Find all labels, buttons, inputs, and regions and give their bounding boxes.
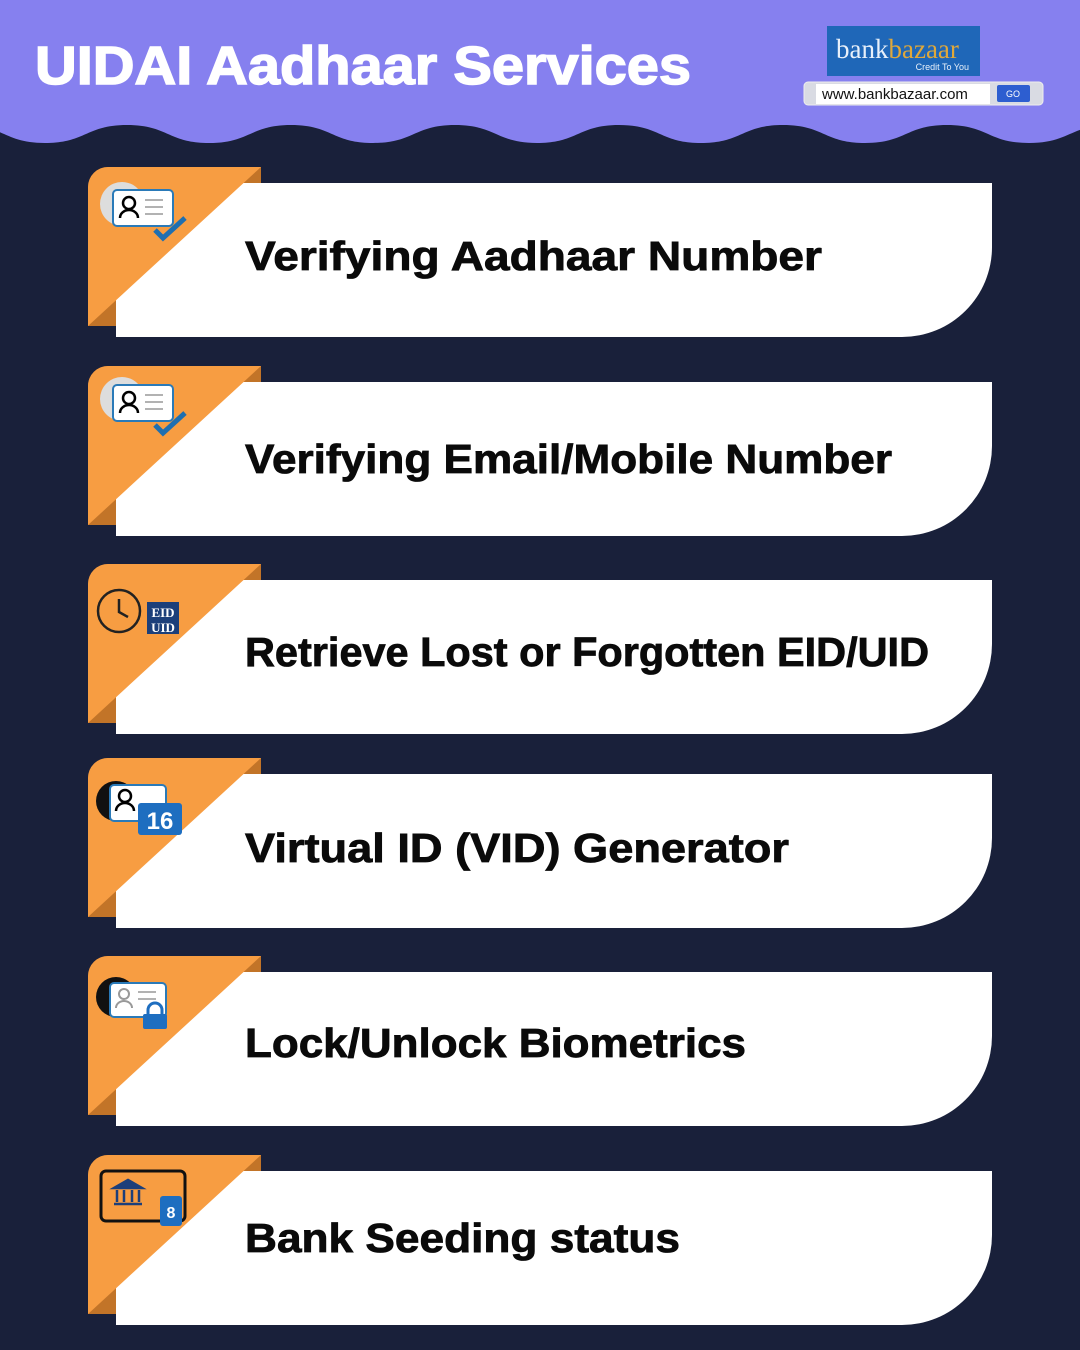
- icon: VID 16: [96, 781, 182, 835]
- logo: Credit To You: [916, 62, 969, 72]
- card 3: [88, 564, 992, 734]
- icon: VID 16: 16: [147, 808, 173, 835]
- title: UIDAI Aadhaar Services: [35, 36, 691, 96]
- card 1: [88, 167, 992, 337]
- card 5: [88, 956, 992, 1126]
- text: Verifying Aadhaar Number: [245, 233, 822, 279]
- card 4: [88, 758, 992, 928]
- icon: history eid uid: EID: [151, 605, 175, 620]
- icon: bank link: [101, 1171, 185, 1226]
- logo: bankbazaar: [836, 34, 959, 64]
- card 2: [88, 366, 992, 536]
- icon: history eid uid: UID: [151, 620, 175, 635]
- icon: bank link: 8: [167, 1205, 176, 1222]
- icon: id card check: [100, 377, 185, 433]
- icon: history eid uid: [98, 590, 179, 635]
- icon: biometric lock: [96, 977, 167, 1029]
- card 6: [88, 1155, 992, 1325]
- logo: [804, 26, 1043, 105]
- text: Lock/Unlock Biometrics: [245, 1020, 746, 1066]
- logo: www.bankbazaar.com: [821, 86, 968, 103]
- header band: [0, 0, 1080, 143]
- logo: GO: [1006, 89, 1020, 99]
- text: Retrieve Lost or Forgotten EID/UID: [245, 629, 929, 675]
- text: Virtual ID (VID) Generator: [245, 825, 789, 871]
- icon: id card check: [100, 182, 185, 238]
- text: Bank Seeding status: [245, 1215, 680, 1261]
- text: Verifying Email/Mobile Number: [245, 436, 892, 482]
